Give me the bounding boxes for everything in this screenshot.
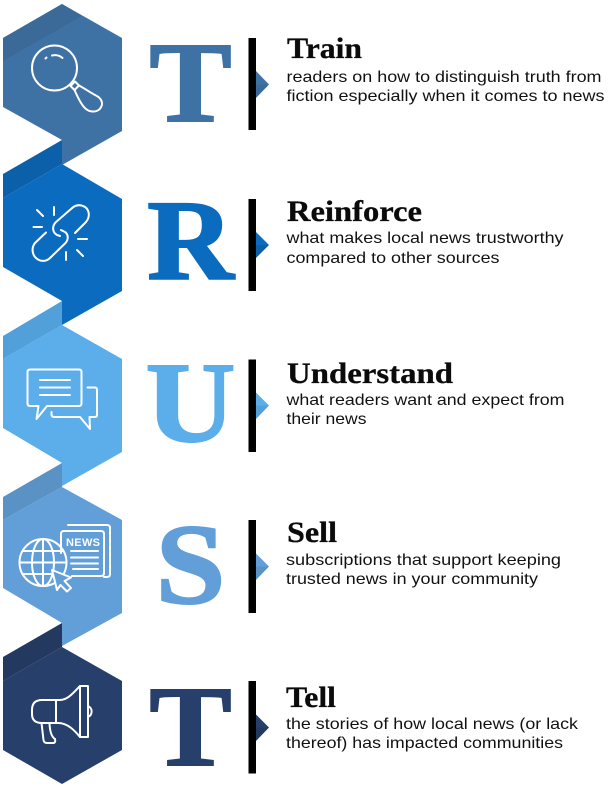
divider bar: [248, 38, 256, 130]
text: Understand description: their news: [286, 411, 366, 428]
hexagon fold: Sell: [3, 463, 62, 520]
text: Train description: readers on how to distinguish truth from: [286, 69, 602, 86]
arrow: [256, 554, 269, 580]
hexagon fold: Understand: [3, 301, 62, 359]
text: Tell description: the stories of how local news (or lack: [286, 716, 579, 733]
arrow: [256, 392, 269, 419]
text: Tell description: thereof) has impacted communities: [286, 735, 563, 752]
text: Train description: fiction especially when it comes to news: [286, 88, 604, 105]
text: Sell description: [286, 552, 561, 588]
heading: Reinforce: Reinforce: [287, 195, 422, 228]
text: Sell description: subscriptions that support keeping: [286, 552, 561, 569]
arrow: [256, 71, 269, 98]
icon: globe, newspaper and cursor: [20, 525, 110, 592]
hexagon: Understand: [3, 325, 122, 486]
text: Reinforce description: what makes local news trustworthy: [285, 230, 564, 247]
letter: R: R: [147, 179, 235, 304]
letter: U: U: [146, 340, 235, 466]
panel: Sell: [3, 463, 561, 646]
panel: Tell: [3, 623, 579, 789]
divider bar: [248, 199, 256, 291]
text: Train description: [286, 69, 604, 105]
panel: Understand: [3, 301, 564, 486]
hexagon: Tell: [3, 647, 122, 784]
letter: T: T: [149, 19, 232, 146]
letter: T: T: [149, 663, 232, 789]
hexagon fold: Reinforce: [3, 140, 62, 198]
letter: S: S: [156, 501, 225, 628]
text: Sell description: trusted news in your community: [286, 571, 538, 588]
hexagon: Train: [3, 4, 122, 165]
heading: Sell: Sell: [287, 516, 337, 549]
divider bar: [248, 360, 256, 452]
text: Understand description: [285, 392, 564, 428]
arrow: [256, 232, 269, 258]
hexagon: Sell: [3, 487, 122, 646]
icon: broken chain link: [33, 205, 89, 261]
heading: Understand: Understand: [287, 357, 453, 390]
hexagon fold: Tell: [3, 623, 62, 681]
heading: Train: Train: [287, 32, 362, 65]
panel: Train: [3, 4, 604, 165]
hexagon fold: Train: [3, 4, 82, 61]
icon: magnifying glass: [32, 46, 102, 112]
heading: Tell: Tell: [286, 681, 336, 714]
hexagon: Reinforce: [3, 164, 122, 325]
divider bar: [248, 681, 256, 774]
text: Understand description: what readers want and expect from: [285, 392, 564, 409]
icon: chat bubbles: [28, 370, 97, 429]
icon label: NEWS: NEWS: [66, 537, 100, 549]
text: Reinforce description: [285, 230, 564, 267]
icon: megaphone: [32, 686, 92, 743]
text: Tell description: [286, 716, 579, 752]
panel: Reinforce: [3, 140, 564, 325]
arrow: [256, 714, 269, 741]
text: Reinforce description: compared to other sources: [286, 250, 500, 267]
divider bar: [248, 520, 256, 613]
